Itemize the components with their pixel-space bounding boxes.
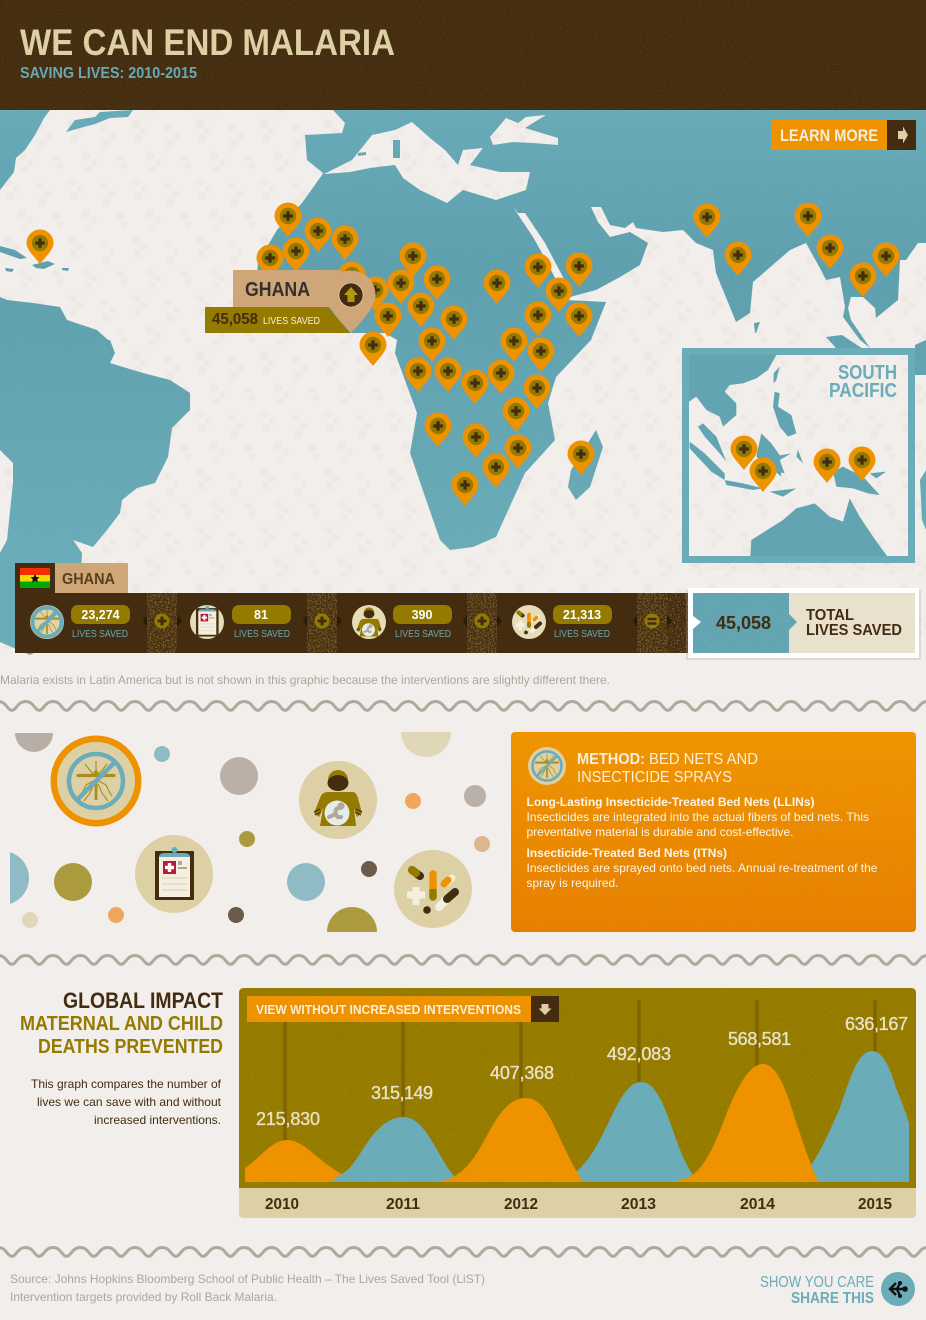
- source note: Intervention targets provided by Roll Back Malaria.: [10, 1290, 277, 1304]
- callout: Ghana: LIVES SAVED: [263, 316, 320, 327]
- total lives saved box: LIVES SAVED: [806, 622, 902, 639]
- share prompt: SHARE THIS: [791, 1290, 874, 1307]
- stat: clinical care: [190, 605, 291, 640]
- method heading: INSECTICIDE SPRAYS: [577, 769, 732, 786]
- country tab: flag and name: GHANA: [62, 571, 115, 588]
- icon: pregnant mother: [299, 761, 377, 839]
- graph description: increased interventions.: [94, 1113, 221, 1127]
- year axis: 2013: [621, 1196, 656, 1213]
- toggle button: VIEW WITHOUT INCREASED INTERVENTIONS: [256, 1002, 521, 1017]
- source note: Source: Johns Hopkins Bloomberg School of Public Health – The Lives Saved Tool (LiST): [10, 1272, 485, 1286]
- stat: bed nets: [30, 605, 130, 640]
- inset label: [829, 362, 897, 402]
- year axis: 2012: [504, 1196, 538, 1213]
- callout: Ghana: 45,058: [212, 311, 258, 328]
- method text: Insecticide-Treated Bed Nets (ITNs): [526, 846, 727, 860]
- value labels: 568,581: [728, 1029, 791, 1049]
- year axis: [239, 1188, 916, 1218]
- icon: clipboard: [135, 835, 213, 913]
- icon: pills: [394, 850, 472, 928]
- stat: clinical care: LIVES SAVED: [234, 628, 290, 640]
- value labels: 492,083: [607, 1044, 671, 1064]
- operator: plus: [154, 614, 170, 628]
- total lives saved box: 45,058: [716, 613, 771, 633]
- heading: global impact: [20, 988, 223, 1058]
- graph description: lives we can save with and without: [37, 1095, 222, 1109]
- icon: mosquito bed net, selected: [50, 736, 142, 826]
- curve 2011: [330, 1117, 460, 1182]
- stat: treatment: LIVES SAVED: [554, 628, 610, 640]
- method text: Insecticides are sprayed onto bed nets. Annual re-treatment of the: [526, 861, 878, 875]
- method text: [526, 795, 878, 890]
- heading: global impact: DEATHS PREVENTED: [38, 1036, 223, 1058]
- world map: [0, 110, 926, 660]
- year axis: 2015: [858, 1196, 892, 1213]
- curve 2014: [668, 1064, 819, 1182]
- method heading: [577, 751, 758, 786]
- method heading: BED NETS AND: [649, 751, 758, 768]
- icon: mosquito small: [528, 747, 566, 785]
- curve 2010: [245, 1140, 360, 1182]
- method text: Long-Lasting Insecticide-Treated Bed Nets (LLINs): [526, 795, 814, 809]
- heading: global impact: GLOBAL IMPACT: [63, 988, 223, 1013]
- map pins: [26, 202, 900, 506]
- method text: spray is required.: [526, 876, 618, 890]
- method text: preventative material is durable and cost-effective.: [526, 825, 794, 839]
- stat: bed nets: LIVES SAVED: [72, 628, 128, 640]
- total lives saved box: [686, 588, 921, 660]
- year gridlines: [285, 1000, 875, 1145]
- share prompt: [760, 1272, 915, 1307]
- decorative circles and intervention icons: [10, 732, 490, 932]
- value labels: 315,149: [371, 1083, 433, 1103]
- value labels: [256, 1014, 908, 1129]
- curve 2015: [805, 1051, 909, 1182]
- operator: plus: [314, 614, 330, 628]
- stat: maternal care: 390: [412, 608, 432, 622]
- total lives saved box: TOTAL: [806, 607, 854, 624]
- share prompt: SHOW YOU CARE: [760, 1274, 874, 1291]
- stat: maternal care: LIVES SAVED: [395, 628, 451, 640]
- chart: lives saved per year: [239, 988, 916, 1218]
- stat: bed nets: 23,274: [81, 608, 120, 622]
- value labels: 407,368: [490, 1063, 554, 1083]
- learn more button: LEARN MORE: [780, 127, 878, 145]
- panel: method: [511, 732, 916, 932]
- year axis: 2014: [740, 1196, 775, 1213]
- method heading: METHOD:: [577, 751, 645, 768]
- curve 2013: [570, 1082, 697, 1182]
- inset label: PACIFIC: [829, 380, 897, 402]
- graph description: This graph compares the number of: [31, 1077, 222, 1091]
- title: WE CAN END MALARIA: [20, 22, 395, 63]
- callout: Ghana: GHANA: [245, 279, 310, 301]
- operator: equals: [644, 614, 660, 628]
- year axis: 2010: [265, 1196, 299, 1213]
- map footnote: Malaria exists in Latin America but is not shown in this graphic because the interventions are slightly different there.: [0, 673, 610, 687]
- panel: south pacific inset: [684, 350, 915, 570]
- inset pins: [730, 436, 876, 492]
- value labels: 636,167: [845, 1014, 908, 1034]
- callout: Ghana: [205, 270, 376, 333]
- stats bar: [15, 593, 690, 653]
- stat: treatment: [512, 605, 612, 640]
- year axis: 2011: [386, 1196, 420, 1213]
- country tab: flag and name: [15, 563, 128, 593]
- stat: clinical care: 81: [254, 608, 268, 622]
- subtitle: SAVING LIVES: 2010-2015: [20, 65, 197, 82]
- inset label: SOUTH: [838, 362, 897, 384]
- header band: [0, 0, 926, 110]
- stat: maternal care: [352, 605, 452, 640]
- learn more button: [771, 120, 916, 157]
- heading: global impact: MATERNAL AND CHILD: [20, 1013, 223, 1035]
- toggle button: [247, 996, 559, 1022]
- stat: treatment: 21,313: [563, 608, 601, 622]
- operator: plus: [474, 614, 490, 628]
- source note: [10, 1272, 485, 1304]
- icon: share: [881, 1272, 915, 1306]
- curve 2012: [433, 1098, 583, 1182]
- method text: Insecticides are integrated into the actual fibers of bed nets. This: [526, 810, 869, 824]
- graph description: [31, 1077, 222, 1127]
- value labels: 215,830: [256, 1109, 320, 1129]
